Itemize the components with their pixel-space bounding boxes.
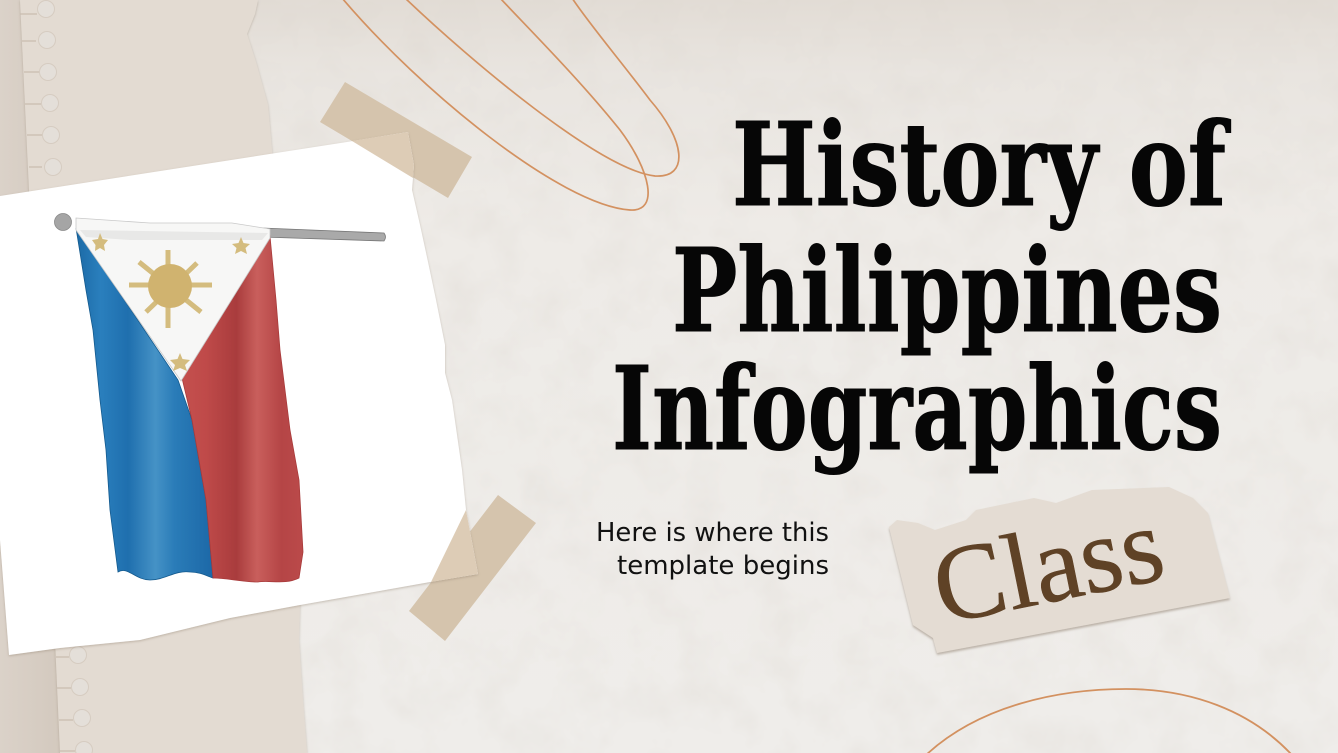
tape: top	[320, 82, 472, 198]
left dark paper strip	[0, 0, 60, 753]
title	[612, 98, 1231, 477]
white triangle	[76, 218, 270, 381]
sun	[129, 250, 212, 328]
tape over sheet corners	[352, 132, 478, 582]
label text: Class	[923, 485, 1173, 648]
subtitle: Here is where this	[596, 518, 829, 548]
stars	[92, 233, 250, 371]
red stripe	[182, 236, 303, 582]
notebook holes	[20, 0, 92, 753]
tape: bottom	[409, 495, 536, 641]
subtitle: template begins	[617, 551, 829, 581]
subtitle	[596, 518, 829, 581]
flag sleeve shading	[80, 230, 268, 240]
bottom orange arc	[926, 689, 1292, 753]
flag of the Philippines	[54, 214, 386, 582]
orange loop doodle	[342, 0, 679, 210]
notebook paper	[20, 0, 307, 753]
blue stripe	[76, 228, 213, 580]
torn label: Class	[889, 485, 1230, 653]
flag pole	[54, 214, 386, 241]
white torn sheet	[0, 132, 478, 655]
